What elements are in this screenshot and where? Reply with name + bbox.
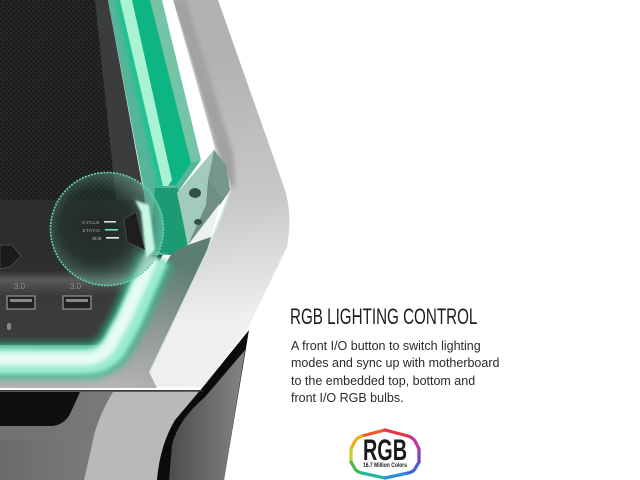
body text: A front I/O button to switch lighting	[291, 339, 481, 353]
body text: modes and sync up with motherboard	[291, 356, 499, 370]
callout: magnified I/O button: M/B	[92, 236, 102, 241]
panel: black mesh and dark front face	[0, 0, 165, 345]
USB ports and labels: 3.0	[70, 282, 82, 291]
body text	[291, 339, 499, 405]
panel: grey area under the bracket	[0, 237, 211, 388]
body text: to the embedded top, bottom and	[291, 374, 475, 388]
callout: magnified I/O button: STATIC	[82, 228, 101, 233]
USB ports and labels	[0, 245, 91, 330]
panel: silver and white outer frame	[148, 0, 289, 387]
light strip: vertical green glow	[108, 0, 215, 255]
body text: front I/O RGB bulbs.	[291, 391, 404, 405]
icon: RGB badge: 16.7 Million Colors	[363, 463, 408, 469]
heading: RGB LIGHTING CONTROL	[290, 304, 477, 329]
callout: magnified I/O button	[50, 172, 164, 286]
light strip: bottom green glow	[0, 258, 156, 361]
panel: lower silver base and dark side	[0, 330, 249, 480]
callout: magnified I/O button: CYCLE	[82, 220, 100, 225]
bracket: silver-green angled bracket	[177, 150, 230, 245]
icon: RGB badge: RGB	[363, 434, 407, 467]
USB ports and labels: 3.0	[14, 282, 26, 291]
